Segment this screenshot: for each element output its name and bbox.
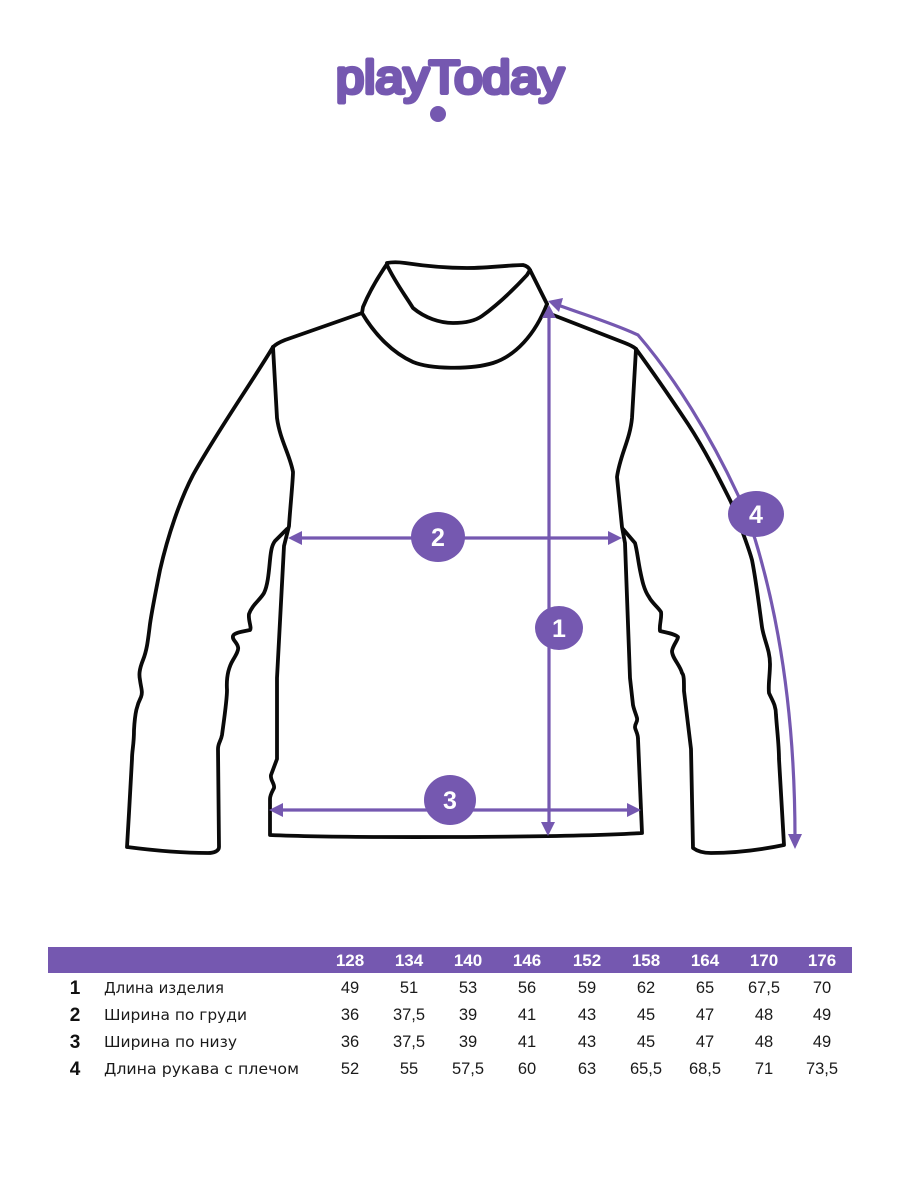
row 3: hem width: 45 [637, 1033, 655, 1051]
arrow 2: chest width: 2 [431, 524, 445, 552]
row 4: sleeve length: 68,5 [689, 1060, 721, 1078]
row 3: hem width: 47 [696, 1033, 714, 1051]
row 3: hem width: 43 [578, 1033, 596, 1051]
row 2: chest width: 47 [696, 1006, 714, 1024]
logo: playToday [336, 51, 564, 122]
arrow 3: hem width [269, 775, 641, 825]
row 2: chest width: 41 [518, 1006, 536, 1024]
row 2: chest width: 45 [637, 1006, 655, 1024]
row 3: hem width: 41 [518, 1033, 536, 1051]
logo: playToday: playToday [336, 51, 564, 103]
row 4: sleeve length: 4 [70, 1059, 81, 1080]
row 4: sleeve length: 60 [518, 1060, 536, 1078]
table header row: 170 [750, 951, 778, 970]
table header row [48, 947, 852, 973]
row 1: garment length [70, 978, 831, 999]
arrow 4: sleeve length: 4 [749, 501, 763, 529]
row 4: sleeve length: 73,5 [806, 1060, 838, 1078]
sweater outline drawing [127, 262, 784, 853]
row 2: chest width: 49 [813, 1006, 831, 1024]
row 4: sleeve length: 71 [755, 1060, 773, 1078]
row 4: sleeve length: 55 [400, 1060, 418, 1078]
row 2: chest width: 2 [70, 1005, 80, 1026]
arrow 4: sleeve length [548, 298, 802, 849]
row 3: hem width [70, 1032, 831, 1053]
table header row: 146 [513, 951, 541, 970]
row 4: sleeve length: 52 [341, 1060, 359, 1078]
row 2: chest width: 36 [341, 1006, 359, 1024]
row 3: hem width: 36 [341, 1033, 359, 1051]
table header row: 134 [395, 951, 424, 970]
table header row: 176 [808, 951, 836, 970]
arrow 1: garment length: 1 [552, 615, 566, 643]
row 1: garment length: 53 [459, 979, 477, 997]
row 1: garment length: 67,5 [748, 979, 780, 997]
table header row: 128 [336, 951, 364, 970]
table header row: 152 [573, 951, 601, 970]
row 4: sleeve length: Длина рукава с плечом [104, 1060, 299, 1078]
row 3: hem width: 48 [755, 1033, 773, 1051]
row 1: garment length: 51 [400, 979, 418, 997]
row 3: hem width: 49 [813, 1033, 831, 1051]
row 2: chest width [70, 1005, 831, 1026]
row 2: chest width: 37,5 [393, 1006, 425, 1024]
row 3: hem width: 37,5 [393, 1033, 425, 1051]
size table [48, 947, 852, 1080]
row 4: sleeve length: 65,5 [630, 1060, 662, 1078]
row 2: chest width: 43 [578, 1006, 596, 1024]
row 3: hem width: 39 [459, 1033, 477, 1051]
row 3: hem width: Ширина по низу [104, 1033, 237, 1051]
row 1: garment length: 1 [70, 978, 81, 999]
row 2: chest width: 48 [755, 1006, 773, 1024]
row 4: sleeve length: 63 [578, 1060, 596, 1078]
table header row: 158 [632, 951, 660, 970]
row 1: garment length: 59 [578, 979, 596, 997]
row 1: garment length: 49 [341, 979, 359, 997]
row 1: garment length: Длина изделия [104, 979, 224, 997]
row 1: garment length: 56 [518, 979, 536, 997]
row 1: garment length: 70 [813, 979, 831, 997]
row 2: chest width: 39 [459, 1006, 477, 1024]
row 2: chest width: Ширина по груди [104, 1006, 247, 1024]
arrow 1: garment length [535, 305, 583, 836]
row 1: garment length: 62 [637, 979, 655, 997]
table header row: 164 [691, 951, 720, 970]
row 1: garment length: 65 [696, 979, 714, 997]
arrow 3: hem width: 3 [443, 787, 457, 815]
row 4: sleeve length: 57,5 [452, 1060, 484, 1078]
row 4: sleeve length [70, 1059, 838, 1080]
row 3: hem width: 3 [70, 1032, 80, 1053]
table header row: 140 [454, 951, 482, 970]
arrow 2: chest width [288, 512, 622, 562]
